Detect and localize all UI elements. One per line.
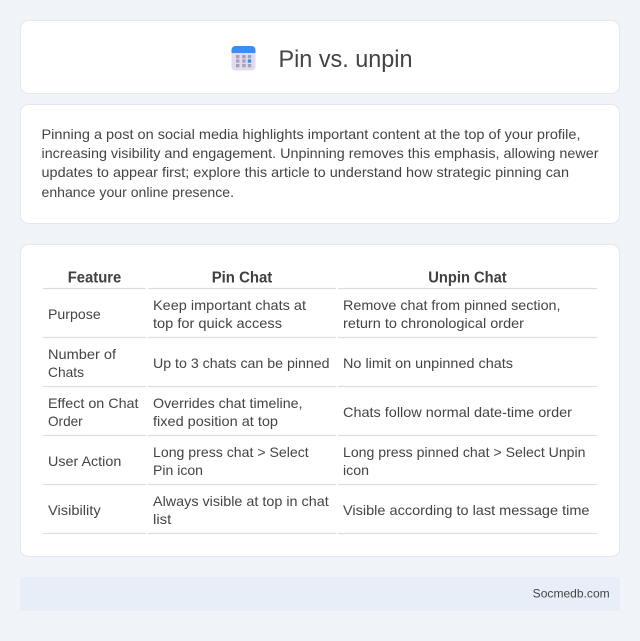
table header row	[68, 270, 507, 286]
panel: comparison table	[20, 244, 620, 556]
row: number of chats	[48, 346, 513, 380]
row: visibility: Visible according to last message time	[343, 502, 590, 518]
row: user action: Pin icon	[153, 462, 203, 478]
text block: intro	[42, 126, 599, 200]
title: Pin vs. unpin	[278, 46, 412, 73]
row: visibility: list	[153, 511, 171, 527]
row: user action: icon	[343, 462, 369, 478]
row: number of chats: Up to 3 chats can be pinned	[153, 355, 330, 371]
row: purpose	[48, 297, 560, 331]
row: purpose: top for quick access	[153, 315, 282, 331]
row: purpose: Purpose	[48, 306, 101, 322]
row: user action: User Action	[48, 453, 121, 469]
row: visibility	[48, 493, 590, 527]
table header row: Pin Chat	[212, 270, 273, 286]
row: user action	[48, 444, 586, 478]
footer source text: Socmedb.com	[533, 586, 610, 600]
row: effect on chat order: Effect on Chat	[48, 395, 139, 411]
row: effect on chat order: fixed position at top	[153, 413, 278, 429]
text block: intro: Pinning a post on social media highlights important content at the top of your profile,	[42, 126, 581, 142]
row: purpose: Remove chat from pinned section,	[343, 297, 560, 313]
row: purpose: return to chronological order	[343, 315, 524, 331]
icon: calendar	[232, 46, 256, 70]
row: number of chats: No limit on unpinned chats	[343, 355, 513, 371]
row: visibility: Always visible at top in chat	[153, 493, 329, 509]
footer bar	[20, 577, 620, 611]
row: number of chats: Number of	[48, 346, 116, 362]
row: effect on chat order: Order	[48, 413, 83, 429]
panel: title header	[20, 20, 620, 94]
row: effect on chat order: Chats follow normal date-time order	[343, 404, 572, 420]
row: effect on chat order: Overrides chat timeline,	[153, 395, 302, 411]
table header row: Feature	[68, 270, 121, 286]
row: visibility: Visibility	[48, 502, 101, 518]
row: purpose: Keep important chats at	[153, 297, 306, 313]
text block: intro: updates to appear first; explore this article to understand how strategic pinning can	[42, 164, 569, 180]
panel: intro paragraph	[20, 104, 620, 224]
row: number of chats: Chats	[48, 364, 84, 380]
text block: intro: increasing visibility and engagement. Unpinning removes this emphasis, allowing newer	[42, 145, 599, 161]
text block: intro: enhance your online presence.	[42, 184, 234, 200]
row: user action: Long press pinned chat > Select Unpin	[343, 444, 586, 460]
row: effect on chat order	[48, 395, 572, 429]
row: user action: Long press chat > Select	[153, 444, 309, 460]
table header row: Unpin Chat	[428, 270, 507, 286]
